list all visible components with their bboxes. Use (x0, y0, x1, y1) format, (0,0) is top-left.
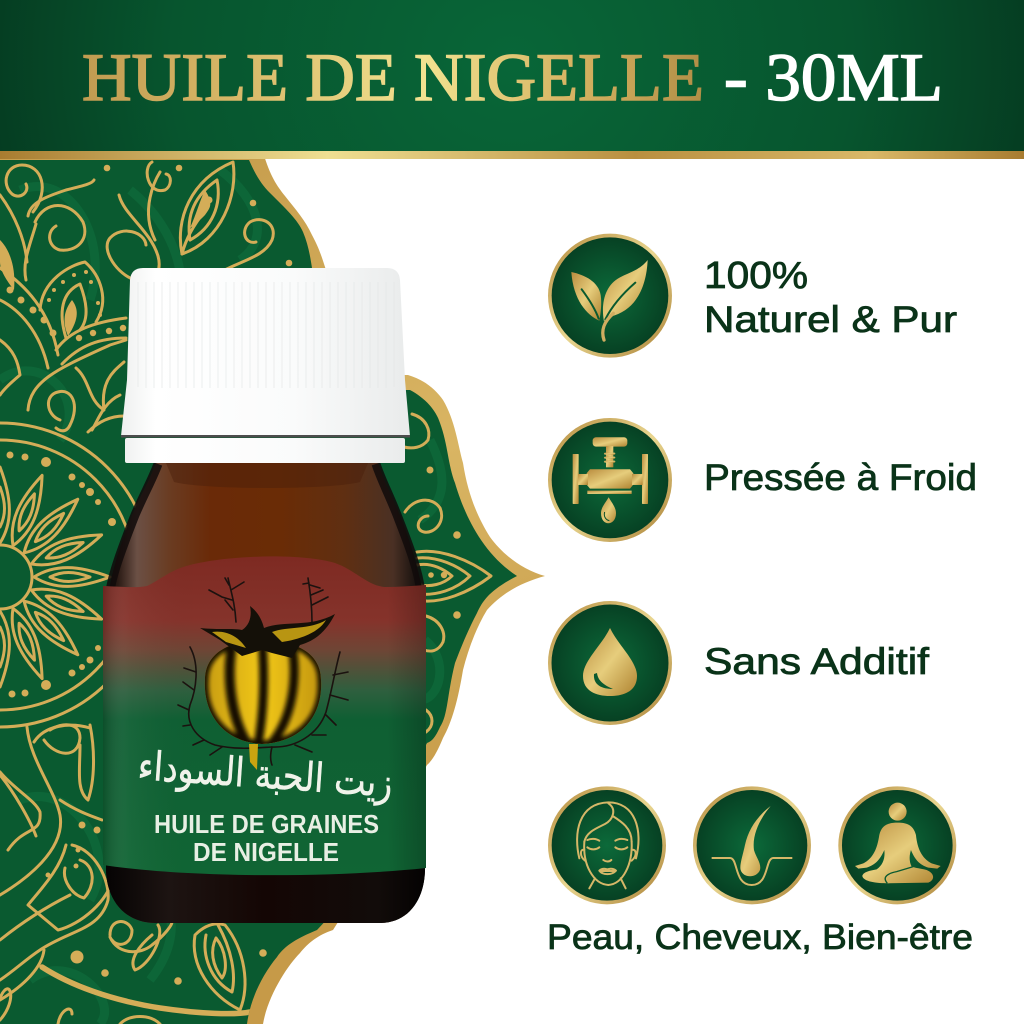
top paisley leaf (180, 162, 234, 254)
text: Peau, Cheveux, Bien-être: Peau, Cheveux, Bien-être (547, 918, 973, 957)
right lobe ornaments (404, 414, 429, 448)
panel: ornamental green and gold backdrop (0, 152, 545, 1024)
bottom spiral (110, 922, 132, 944)
product bottle (103, 268, 426, 923)
label text line 1: HUILE DE GRAINES (154, 809, 379, 839)
title gold part: HUILE DE NIGELLE (82, 39, 704, 115)
text: Pressée à Froid: Pressée à Froid (704, 457, 977, 498)
icon: meditation (838, 786, 956, 904)
title white part: - 30ML (724, 39, 943, 115)
icon: oil drop (548, 601, 672, 725)
text: 100%: 100% (704, 255, 808, 297)
feature: no additive (548, 601, 930, 725)
icon: face (548, 786, 666, 904)
feature: skin, hair, wellness (547, 786, 973, 957)
capsule crown (200, 606, 335, 658)
mandala (0, 423, 152, 727)
bottle base (106, 862, 425, 923)
left lower ornaments (0, 727, 61, 895)
label (103, 556, 426, 875)
text: Sans Additif: Sans Additif (704, 641, 930, 682)
text: Naturel & Pur: Naturel & Pur (704, 299, 957, 340)
panel green field (0, 160, 517, 1024)
header banner (0, 0, 1024, 159)
ornament dots (104, 165, 110, 171)
capsule stem (249, 744, 258, 770)
white cap (121, 268, 410, 438)
bottle glass (106, 462, 425, 923)
gold band (0, 151, 1024, 159)
dark shoulder edges (110, 464, 421, 592)
feature: cold pressed (548, 418, 977, 542)
bottom band (42, 967, 250, 1014)
panel gold border (0, 152, 545, 1024)
label text line 2: DE NIGELLE (193, 837, 339, 867)
dotted paisley (0, 268, 58, 355)
neck ring (125, 438, 405, 463)
feature: natural and pure (548, 234, 957, 358)
arabic text: زيت الحبة السوداء (137, 743, 394, 807)
icon: leaves (548, 234, 672, 358)
icon: nigella branches (178, 578, 348, 765)
icon: hair follicle (693, 786, 811, 904)
bottom leaf (194, 924, 245, 1010)
icon: press valve (548, 418, 672, 542)
ornaments (0, 162, 491, 1024)
oil shadow at neck (166, 463, 368, 488)
icon: nigella capsule (200, 606, 335, 770)
top-left swirls (6, 165, 42, 212)
